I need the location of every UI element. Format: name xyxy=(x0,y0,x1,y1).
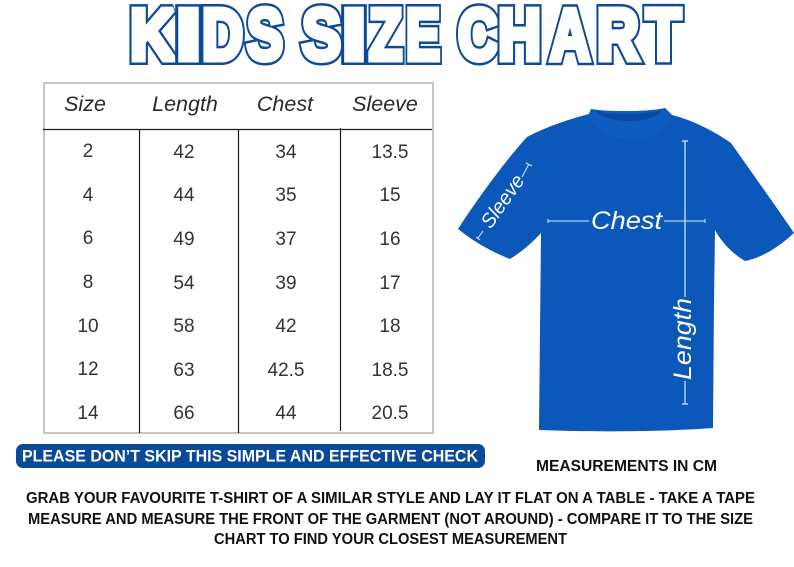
chest column: 34 xyxy=(275,142,297,163)
chest column: 35 xyxy=(275,185,297,206)
length column: 58 xyxy=(173,316,195,337)
length column: 66 xyxy=(173,403,195,424)
chest column: 39 xyxy=(275,273,297,294)
sleeve column xyxy=(372,142,408,424)
title xyxy=(130,0,681,76)
length measure: Length xyxy=(669,298,697,380)
sleeve column: 20.5 xyxy=(372,403,408,424)
length column: 63 xyxy=(173,360,195,381)
sleeve column: 15 xyxy=(379,185,401,206)
t-shirt collar xyxy=(589,108,672,139)
sleeve column: 13.5 xyxy=(372,142,408,163)
chest column: 37 xyxy=(275,229,297,250)
size table xyxy=(43,83,433,433)
sleeve column: 18.5 xyxy=(372,360,408,381)
size column xyxy=(77,141,99,424)
chest column xyxy=(268,142,304,424)
table header row: Sleeve xyxy=(352,92,418,116)
chest column: 42 xyxy=(275,316,297,337)
callout banner: PLEASE DON’T SKIP THIS SIMPLE AND EFFECTIVE CHECK xyxy=(22,448,478,466)
length column: 42 xyxy=(173,142,195,163)
length column: 44 xyxy=(173,185,195,206)
size column: 12 xyxy=(77,359,99,380)
chest column: 44 xyxy=(275,403,297,424)
length measure xyxy=(669,141,697,404)
size column: 2 xyxy=(83,141,93,162)
sleeve column: 17 xyxy=(379,273,401,294)
size column: 6 xyxy=(83,228,93,249)
chest measure: Chest xyxy=(591,207,663,235)
chest measure xyxy=(548,207,705,235)
table header row: Chest xyxy=(257,92,314,116)
size column: 14 xyxy=(77,403,99,424)
table header row: Length xyxy=(152,92,218,116)
t-shirt body xyxy=(458,108,794,431)
sleeve measure: Sleeve xyxy=(477,171,529,232)
sleeve column: 16 xyxy=(379,229,401,250)
size column: 10 xyxy=(77,316,99,337)
instructions text: MEASURE AND MEASURE THE FRONT OF THE GARMENT (NOT AROUND) - COMPARE IT TO THE SIZE xyxy=(28,511,753,528)
size column: 8 xyxy=(83,272,93,293)
length column: 54 xyxy=(173,273,195,294)
table header row: Size xyxy=(64,92,106,116)
table header row xyxy=(64,92,418,116)
instructions text xyxy=(26,490,755,548)
sleeve column: 18 xyxy=(379,316,401,337)
t-shirt diagram xyxy=(458,108,794,431)
instructions text: GRAB YOUR FAVOURITE T-SHIRT OF A SIMILAR STYLE AND LAY IT FLAT ON A TABLE - TAKE A TAPE xyxy=(26,490,755,507)
instructions text: CHART TO FIND YOUR CLOSEST MEASUREMENT xyxy=(214,531,567,548)
length column xyxy=(173,142,195,424)
length column: 49 xyxy=(173,229,195,250)
size column: 4 xyxy=(83,185,94,206)
chest column: 42.5 xyxy=(268,360,304,381)
units note: MEASUREMENTS IN CM xyxy=(536,458,717,475)
